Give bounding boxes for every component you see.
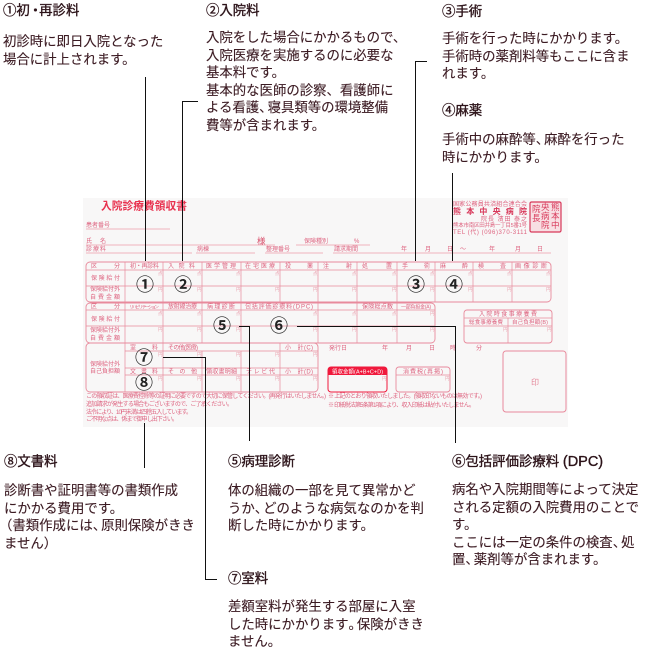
table: billing items row 1: [86, 262, 551, 302]
total amount box: 領収金額(A+B+C+D): [332, 368, 383, 376]
table: billing items row 1: 在宅医療: [245, 262, 275, 270]
heading 4: ④麻薬: [442, 103, 482, 118]
table: billing items row 1: 保険給付外: [90, 285, 120, 293]
table: billing items row 2: 放射線治療: [168, 302, 197, 310]
consumption tax box: 消費税(再掲): [403, 368, 443, 376]
table: billing items row 2: 円: [392, 327, 397, 333]
patient info fields: 患者番号: [86, 221, 110, 229]
table: self-pay items: テレビ代: [246, 368, 275, 376]
meal cost box: 円: [547, 327, 552, 333]
table: billing items row 1: 区 分: [91, 262, 120, 270]
table: self-pay items: 円: [313, 376, 318, 382]
patient info fields: 病棟: [197, 245, 209, 253]
meal cost box: [464, 310, 552, 343]
table: self-pay items: そ の 他: [168, 368, 197, 376]
table: billing items row 2: 区 分: [91, 302, 120, 310]
text 7: した時にかかります。保険がきき: [228, 617, 424, 632]
table: billing items row 2: 包括評価診療料(DPC): [245, 302, 313, 310]
table: billing items row 1: 自費金額: [90, 293, 120, 301]
stamp box: 印: [531, 377, 539, 387]
text 6: 病名や入院期間等によって決定: [452, 482, 638, 497]
form number markers: ②: [174, 275, 192, 295]
text 3: [442, 31, 629, 81]
patient info fields: 診療料: [86, 245, 106, 253]
form number markers: ③: [407, 275, 425, 295]
text 4: 時にかかります。: [442, 150, 548, 165]
meal cost box: 総食事療養費: [469, 318, 503, 326]
table: self-pay items: 自己負担額: [90, 367, 120, 375]
consumption tax box: 円: [445, 376, 450, 382]
patient info fields: ～: [460, 247, 466, 253]
text 7: ません。: [228, 634, 281, 649]
leader line 3: [416, 62, 427, 261]
footer notes: ご不明な点は、係まで御申し出下さい。: [86, 415, 178, 423]
hospital seal: [530, 202, 561, 232]
table: billing items row 1: 保険給付: [91, 274, 120, 282]
table: billing items row 1: 点: [158, 271, 163, 277]
hospital info: 院長 濱田 泰之: [481, 215, 527, 223]
table: billing items row 2: 保険給付外: [90, 326, 120, 334]
table: billing items row 1: 円: [158, 287, 163, 293]
patient info fields: 月: [425, 246, 431, 253]
hospital info: [453, 200, 528, 236]
form number markers: ⑧: [135, 373, 153, 393]
text 2: [206, 30, 406, 133]
table: billing items row 1: 点: [468, 271, 473, 277]
table: billing items row 2: 点: [236, 311, 241, 317]
table: self-pay items: その他(医療): [168, 344, 198, 352]
total amount box: [328, 367, 387, 392]
footer notes: 追加請求が発生する場合もございますので、ご了承ください。: [86, 400, 233, 408]
text 6: ここには一定の条件の検査、処: [452, 535, 634, 550]
table: billing items row 2: 保険総点数: [362, 302, 393, 310]
meal cost box: 自己負担額(B): [512, 318, 548, 326]
leader line 1: [144, 77, 146, 261]
issue date: 年: [382, 344, 388, 352]
patient info fields: 氏 名: [86, 237, 106, 245]
patient info fields: 様: [257, 236, 266, 246]
hospital seal: 病: [541, 211, 550, 221]
heading 3: ③手術: [442, 4, 482, 19]
heading 7: ⑦室料: [228, 571, 268, 586]
table: billing items row 1: 円: [392, 287, 397, 293]
footer notes: 法令により、10円未満は四捨五入しています。: [86, 408, 192, 416]
text 5: うか、どのような病気なのかを判: [228, 501, 424, 516]
text 2: 入院医療を実施するのに必要な: [206, 48, 393, 63]
issue date: 発行日: [329, 344, 347, 352]
table: billing items row 1: 円: [352, 287, 357, 293]
table: billing items row 1: 点: [236, 271, 241, 277]
heading 6: ⑥包括評価診療料 (DPC): [452, 454, 603, 470]
hospital seal: 長: [532, 213, 541, 223]
text 2: 基本料です。: [206, 65, 285, 80]
text 2: 入院をした場合にかかるもので、: [206, 30, 406, 45]
hospital seal: 熊: [551, 202, 560, 212]
table: billing items row 1: 医学管理: [206, 262, 236, 270]
text 6: 置、薬剤等が含まれます。: [452, 552, 606, 567]
text 5: [228, 483, 424, 533]
table: billing items row 1: 点: [313, 271, 318, 277]
table: self-pay items: 小 計(D): [285, 368, 313, 376]
text 1: 初診時に即日入院となった: [3, 34, 163, 49]
issue date: 時: [450, 344, 456, 352]
table: self-pay items: 円: [236, 352, 241, 358]
footer notes: [86, 392, 482, 423]
hospital seal: 院: [541, 220, 550, 230]
consumption tax box: [396, 367, 450, 392]
patient info fields: [86, 221, 551, 253]
table: self-pay items: 室 料: [130, 344, 158, 352]
form number markers: ④: [445, 275, 463, 295]
table: billing items row 1: 円: [430, 287, 435, 293]
table: self-pay items: 円: [197, 376, 202, 382]
issue date: [329, 344, 482, 352]
issue date: 分: [476, 344, 482, 352]
footer notes: ※ 印紙税法第5条第1項により、収入印紙は貼付いたしません。: [328, 401, 475, 409]
table: billing items row 2: 円: [236, 327, 241, 333]
hospital info: TEL (代) (096)370-3111: [453, 228, 528, 236]
form number markers: ⑦: [135, 348, 153, 368]
hospital info: 熊本中央病院: [453, 206, 527, 216]
text 1: 場合に計上されます。: [3, 52, 136, 67]
table: billing items row 2: 点: [392, 311, 397, 317]
table: billing items row 1: 手 術: [402, 262, 430, 270]
meal cost box: 円: [503, 327, 508, 333]
table: billing items row 1: 円: [546, 287, 551, 293]
table: billing items row 1: 初・再診料: [130, 262, 159, 270]
table: billing items row 2: 保険給付: [91, 315, 120, 323]
text 8: （書類作成には、原則保険がきき: [0, 518, 195, 533]
table: billing items row 2: 円: [158, 327, 163, 333]
text 2: 費等が含まれます。: [206, 118, 325, 133]
table: billing items row 2: 円: [352, 327, 357, 333]
heading 5: ⑤病理診断: [228, 454, 295, 469]
text 8: 診断書や証明書等の書類作成: [4, 483, 178, 498]
table: self-pay items: [86, 343, 318, 392]
table: billing items row 1: 円: [275, 287, 280, 293]
table: self-pay items: 文 書 料: [130, 368, 158, 376]
table: billing items row 1: 円: [507, 287, 512, 293]
patient info fields: 年: [489, 245, 495, 253]
table: billing items row 1: 点: [392, 271, 397, 277]
footer notes: ※ 上記のとおり領収いたしました。(領収印ないものは無効です。): [328, 392, 482, 400]
meal cost box: 入院時食事療養費: [479, 310, 537, 318]
table: billing items row 2: 円: [313, 327, 318, 333]
table: billing items row 1: 点: [275, 271, 280, 277]
text 8: にかかる費用です。: [4, 501, 123, 516]
table: self-pay items: 円: [275, 352, 280, 358]
leader line 7: [163, 358, 217, 580]
hospital info: 熊本市南区田井島一丁目5番1号: [453, 221, 527, 229]
table: billing items row 2: 円: [430, 311, 435, 317]
text 5: 断した時にかかります。: [228, 518, 374, 533]
leader line 6: [297, 326, 456, 443]
patient info fields: 保険種別: [304, 237, 328, 245]
table: billing items row 1: 点: [352, 271, 357, 277]
text 4: 手術中の麻酔等、麻酔を行った: [442, 132, 624, 147]
leader line 5: [239, 326, 250, 441]
table: billing items row 1: 点: [507, 271, 512, 277]
text 6: [452, 482, 639, 567]
table: billing items row 2: リハビリテーション: [129, 304, 159, 310]
footer notes: この領収証は、医療費控除等の証明に必要ですので大切に保管してください。(再発行はいたしません。): [86, 392, 326, 400]
table: self-pay items: 小 計(C): [285, 344, 313, 352]
table: self-pay items: 領収書明細: [206, 368, 237, 376]
text 3: 手術を行った時にかかります。: [442, 31, 628, 46]
issue date: 日: [429, 345, 435, 352]
table: self-pay items: 保険給付外: [90, 360, 120, 368]
leader line 2: [182, 102, 198, 261]
text 2: よる看護、寝具類等の環境整備: [206, 100, 388, 115]
hospital seal: 中: [551, 220, 560, 230]
form number markers: [135, 275, 463, 393]
table: self-pay items: 円: [236, 376, 241, 382]
patient info fields: 請求期間: [334, 245, 358, 253]
receipt title: 入院診療費領収書: [101, 200, 187, 212]
table: billing items row 1: 点: [197, 271, 202, 277]
hospital seal: 本: [551, 211, 560, 221]
text 4: [442, 132, 624, 165]
form number markers: ①: [136, 275, 154, 295]
table: billing items row 1: 処 置: [362, 262, 392, 270]
text 7: 差額室料が発生する部屋に入室: [228, 599, 415, 614]
total amount box: 円: [382, 376, 387, 382]
table: billing items row 1: 画像診断: [515, 262, 547, 270]
table: billing items row 1: 検 査: [478, 262, 506, 270]
patient info fields: 日: [447, 246, 453, 253]
leader line 4: [452, 173, 454, 261]
form number markers: ⑥: [270, 316, 288, 336]
table: billing items row 1: 円: [197, 287, 202, 293]
table: billing items row 1: 円: [313, 287, 318, 293]
table: self-pay items: 円: [158, 376, 163, 382]
form number markers: ⑤: [213, 316, 231, 336]
patient info fields: 年: [401, 245, 407, 253]
table: billing items row 2: 自費金額: [90, 334, 120, 342]
hospital seal: 央: [541, 202, 550, 212]
table: billing items row 2: 円: [197, 327, 202, 333]
table: billing items row 1: 入 院 料: [168, 262, 195, 270]
heading 1: ①初・再診料: [3, 3, 79, 18]
table: billing items row 2: 一部負担金(A): [401, 304, 431, 310]
text 8: [0, 483, 195, 551]
text 1: [3, 34, 163, 67]
table: self-pay items: 円: [197, 352, 202, 358]
patient info fields: %: [354, 239, 360, 245]
table: billing items row 1: 麻 酔: [440, 262, 468, 270]
receipt paper: [83, 198, 568, 427]
text 3: 手術時の薬剤料等もここに含ま: [442, 49, 629, 64]
heading 2: ②入院料: [206, 3, 260, 18]
patient info fields: 日: [537, 246, 543, 253]
table: self-pay items: 円: [275, 376, 280, 382]
table: billing items row 1: 円: [468, 287, 473, 293]
text 3: れます。: [442, 66, 494, 81]
table: billing items row 2: [86, 302, 435, 343]
table: billing items row 2: 病理診断: [207, 302, 235, 310]
table: billing items row 2: 点: [352, 311, 357, 317]
table: billing items row 2: 円: [430, 327, 435, 333]
text 2: 基本的な医師の診察、看護師に: [206, 83, 393, 98]
table: self-pay items: 円: [313, 352, 318, 358]
table: billing items row 1: 点: [430, 271, 435, 277]
hospital info: 国家公務員共済組合連合会: [453, 200, 527, 208]
issue date: 月: [406, 345, 412, 352]
leader line 8: [144, 423, 146, 468]
table: billing items row 2: 点: [313, 311, 318, 317]
stamp box: [503, 351, 566, 412]
table: billing items row 1: 投 薬: [285, 262, 313, 270]
text 7: [228, 599, 424, 649]
table: billing items row 1: 円: [236, 287, 241, 293]
hospital seal: 院: [532, 204, 541, 214]
text 5: 体の組織の一部を見て異常かど: [228, 483, 415, 498]
text 6: される定額の入院費用のことで: [452, 500, 639, 515]
text 6: す。: [452, 517, 477, 532]
heading 8: ⑧文書料: [4, 454, 58, 469]
text 8: ません）: [4, 536, 51, 551]
table: billing items row 2: 点: [158, 311, 163, 317]
table: self-pay items: 円: [158, 352, 163, 358]
table: billing items row 1: 点: [546, 271, 551, 277]
patient info fields: 整理番号: [266, 245, 290, 253]
table: billing items row 1: 注 射: [323, 262, 352, 270]
patient info fields: 月: [515, 246, 521, 253]
table: billing items row 2: 点: [197, 311, 202, 317]
